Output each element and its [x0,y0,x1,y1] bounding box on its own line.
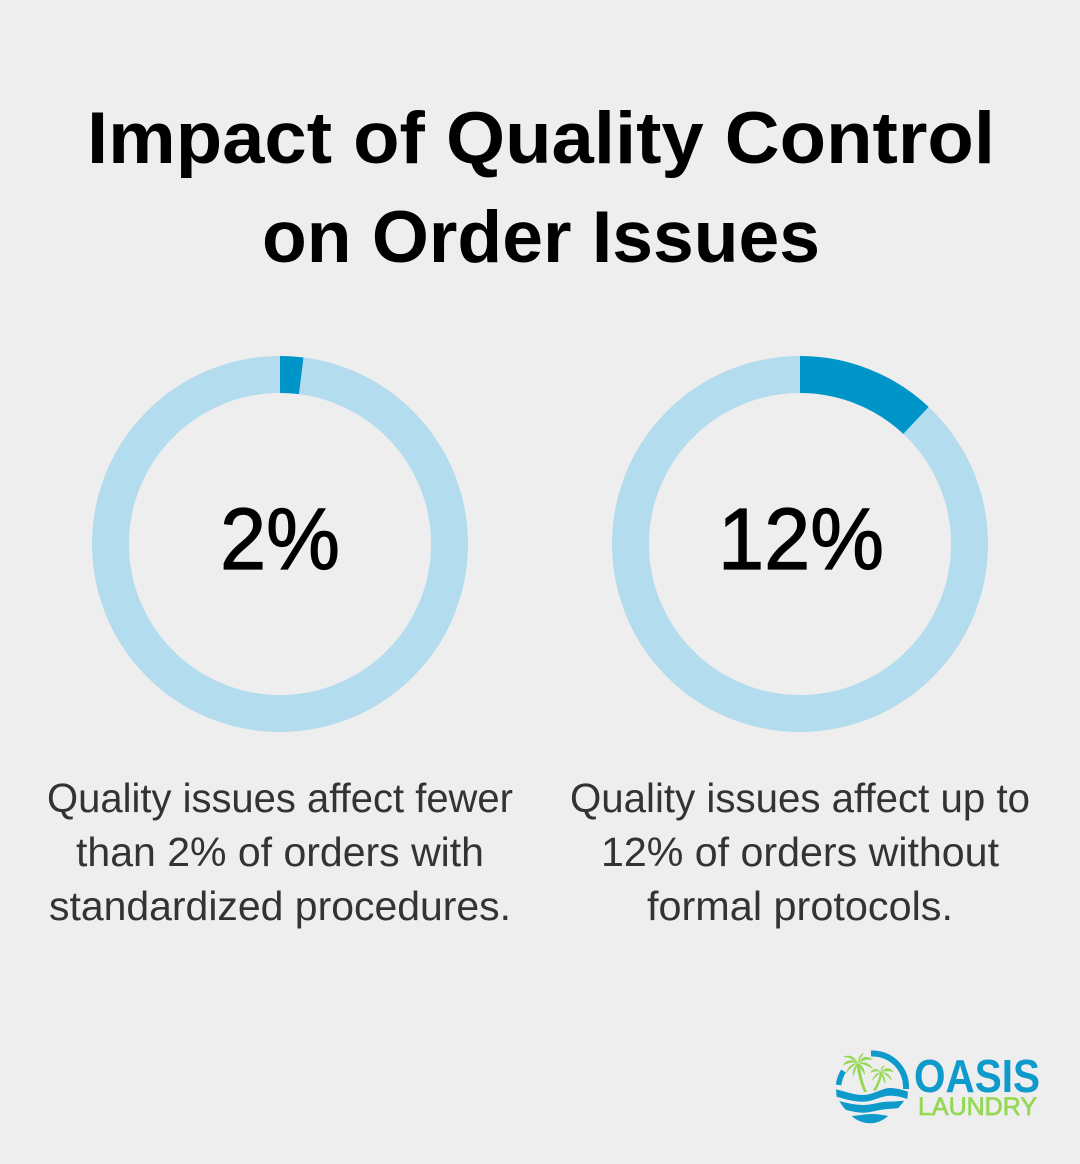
description: 12%: 12% of orders without [601,829,1000,875]
stat value: 12%: 12% [718,491,884,588]
wordmark: LAUNDRY: LAUNDRY [918,1093,1037,1121]
panel: 2% with standardized procedures [47,374,513,929]
wordmark: OASIS: OASIS [914,1050,1040,1102]
title [87,98,995,278]
description: 2% [47,775,513,929]
icon: waves [836,1088,908,1123]
title: Impact of Quality Control [87,98,995,179]
description: 12%: Quality issues affect up to [570,775,1030,821]
panel: 12% without formal protocols [570,374,1030,929]
description: 2%: than 2% of orders with [76,829,484,875]
description: 12%: formal protocols. [647,883,953,929]
title: on Order Issues [262,197,820,278]
description: 2%: Quality issues affect fewer [47,775,513,821]
donut chart: 12% [630,374,970,714]
icon: sun ring [871,1053,906,1089]
donut chart: 2% [110,374,450,714]
description: 12% [570,775,1030,929]
description: 2%: standardized procedures. [49,883,511,929]
logo: Oasis Laundry [836,1050,1040,1123]
icon: palm trees [842,1053,894,1092]
stat value: 2%: 2% [220,491,340,588]
